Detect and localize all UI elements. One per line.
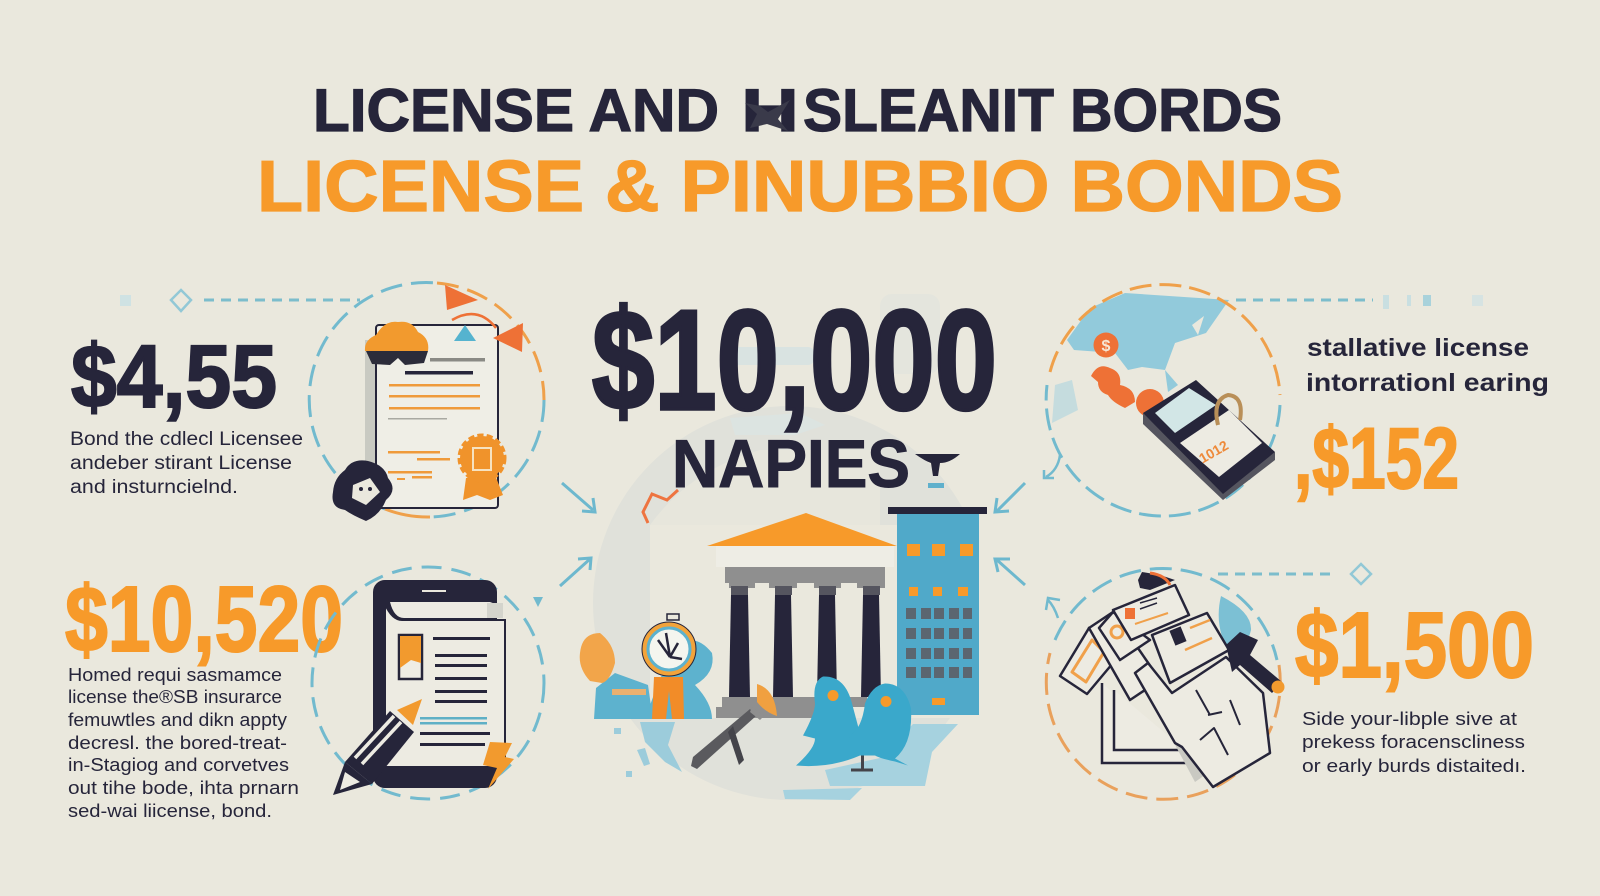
text block (1306, 334, 1549, 397)
text block (68, 665, 299, 821)
figure: $10,520: $10,520 (65, 567, 343, 671)
central label: NAPIES: NAPIES (672, 426, 910, 502)
text block: Side your-libple sive at (1302, 708, 1517, 729)
text block: license the®SB insurarce (68, 687, 282, 707)
entablature (725, 567, 885, 588)
orange zigzag line (643, 490, 678, 523)
text block: sed-wai liicense, bond. (68, 801, 272, 821)
title line 2: LICENSE & PINUBBIO BONDS (257, 147, 1343, 227)
icon: courthouse (707, 513, 897, 718)
icon: pen (1226, 632, 1284, 694)
pediment (707, 513, 897, 546)
figure: ,$152: ,$152 (1294, 411, 1459, 507)
small arrow (1046, 598, 1060, 618)
icon: document (365, 325, 498, 508)
arrows pointing to center (560, 483, 1025, 586)
connector: dashed line and diamond (120, 290, 360, 311)
title line 1: SLEANIT BORDS (803, 77, 1282, 144)
dashed ring (1046, 568, 1280, 799)
icon: tablet (373, 580, 505, 788)
small arrow (1044, 455, 1060, 478)
icon: coins: $ (1102, 338, 1111, 355)
title (257, 77, 1343, 227)
icon: black seal (332, 460, 393, 521)
base steps (722, 697, 867, 707)
icon: feather (1138, 572, 1175, 590)
icon: award badge (460, 436, 504, 500)
text block: Homed requi sasmamce (68, 665, 282, 685)
icon: blue drop (1219, 596, 1251, 650)
small arrow (533, 597, 543, 607)
text lines (420, 637, 490, 746)
dashed ring (1046, 285, 1280, 516)
title line 1: H (741, 77, 799, 144)
icon: clock medal (642, 614, 696, 719)
title line 1 (313, 77, 1282, 144)
icon: phone: 1012 (1196, 437, 1231, 466)
columns (729, 586, 881, 697)
small tree glyph (454, 325, 476, 341)
panel: top right (1044, 285, 1549, 516)
panel: central illustration background (593, 294, 1000, 800)
text block: intorrationl earing (1306, 369, 1549, 397)
icon: orange cloud cap (365, 322, 428, 365)
title line 1: LICENSE AND (313, 77, 719, 144)
panel: bottom left (65, 567, 544, 821)
text block: andeber stirant License (70, 453, 292, 474)
icon: tree and blue silhouette (580, 633, 713, 719)
dashed ring (312, 567, 544, 799)
shadow under hand (1142, 683, 1205, 782)
text block: in-Stagiog and corvetves (68, 755, 289, 775)
text block: stallative license (1307, 334, 1529, 362)
text block (70, 429, 303, 498)
dashed ring (309, 283, 544, 517)
figure: $4,55: $4,55 (71, 326, 277, 426)
figure: $1,500: $1,500 (1295, 593, 1534, 697)
bookmark (399, 635, 422, 679)
icon: coins (1091, 332, 1164, 417)
orange windows (907, 544, 973, 705)
connector: dashed line and diamond (1218, 564, 1371, 584)
text block: and insturncielnd. (70, 477, 238, 498)
text block: prekess foracenscliness (1302, 731, 1525, 752)
icon: hammer (691, 684, 777, 769)
text block: femuwtles and dikn appty (68, 710, 287, 730)
panel: top left (70, 283, 544, 521)
panel: bottom right (1046, 564, 1534, 799)
text block: decresl. the bored-treat- (68, 733, 287, 753)
big number: $10,000: $10,000 (592, 281, 997, 440)
icon: tower building (888, 507, 987, 715)
text block: or early burds distaitedı. (1302, 755, 1526, 776)
icon: blue birds (796, 676, 911, 772)
connector: dashed line (1236, 295, 1483, 309)
icon: frame (1102, 683, 1192, 763)
icon: lightning bolt (483, 742, 514, 789)
text block: out tihe bode, ihta prnarn (68, 778, 299, 798)
icon: world map (1052, 293, 1229, 423)
gray windows (906, 608, 972, 678)
icon: red-orange arrowheads (445, 285, 523, 352)
icon: anvil (915, 454, 960, 488)
icon: hand holding card (1135, 613, 1270, 787)
icon: phone (1143, 380, 1275, 500)
text block: Bond the cdlecl Licensee (70, 429, 303, 450)
text block (1302, 708, 1526, 776)
icon: cards (1060, 585, 1189, 700)
icon: pencil (333, 699, 422, 795)
